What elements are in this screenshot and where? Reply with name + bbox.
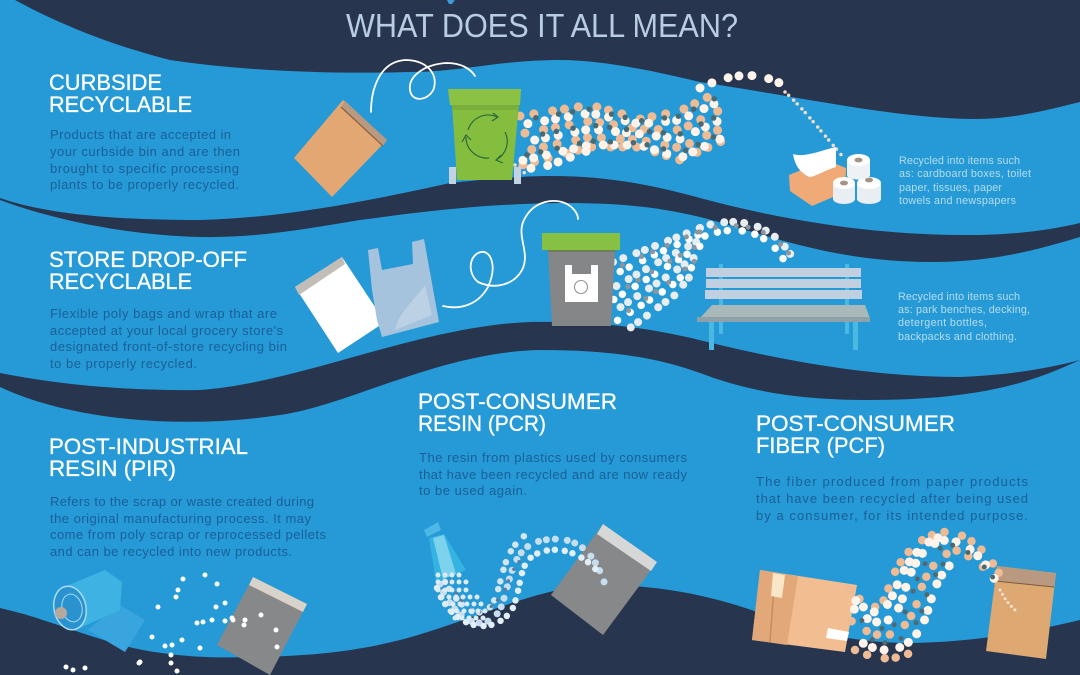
text block: curbside description: plants to be properly recycled.: [50, 177, 239, 192]
text block: store drop-off description: [50, 306, 287, 371]
text block: store drop-off description: to be properly recycled.: [50, 356, 197, 371]
navy wave 2: [0, 176, 1080, 262]
heading: post-consumer resin: RESIN (PCR): [418, 411, 546, 436]
text block: curbside description: brought to specific processing: [50, 161, 239, 176]
heading: curbside recyclable: RECYCLABLE: [49, 92, 192, 117]
icon: bag symbol: [565, 265, 598, 302]
bottom navy wave: [0, 585, 1080, 675]
icon: kraft mailer from fiber: [986, 566, 1056, 659]
text block: curbside recycled items: paper, tissues, paper: [899, 182, 1002, 194]
icon: paper particle stream: [515, 75, 844, 174]
icon: recycle arrows: [462, 113, 507, 163]
text block: curbside description: your curbside bin and are then: [50, 144, 240, 159]
icon: park bench: [697, 264, 870, 350]
icon: white poly mailer: [295, 257, 385, 353]
heading: store drop-off recyclable: RECYCLABLE: [49, 269, 192, 294]
text block: curbside recycled items: as: cardboard boxes, toilet: [899, 168, 1031, 180]
text block: curbside recycled items: towels and newspapers: [899, 195, 1017, 207]
icon: fiber particle stream: [850, 532, 1015, 658]
icon: plastic bag: [368, 239, 439, 337]
panel: post-consumer fiber text: [756, 411, 1028, 523]
text block: PIR description: come from poly scrap or reprocessed pellets: [50, 527, 326, 542]
text block: PCR description: to be used again.: [419, 483, 527, 498]
heading: store drop-off recyclable: [49, 247, 247, 294]
top navy wave: [15, 0, 1080, 119]
text block: PCR description: The resin from plastics used by consumers: [419, 450, 688, 465]
text block: PCR description: that have been recycled and are now ready: [419, 467, 688, 482]
navy wave 3: [0, 322, 1080, 422]
icon: kraft mailer: [294, 100, 387, 197]
panel: store drop-off text: [49, 247, 287, 371]
icon: plastic bottle: [424, 522, 466, 582]
icon: PCR resin stream: [437, 532, 606, 626]
text block: PCF description: that have been recycled after being used: [756, 491, 1028, 506]
heading: post-consumer resin: POST-CONSUMER: [418, 389, 617, 414]
text block: PCF description: [756, 474, 1028, 523]
icon: cardboard box: [752, 570, 857, 652]
icon: resin pellets: [66, 575, 277, 671]
arrow: white squiggle to grey bin: [443, 201, 578, 307]
heading: post-industrial resin: RESIN (PIR): [49, 456, 176, 481]
arrow: white squiggle to green bin: [371, 60, 475, 112]
heading: store drop-off recyclable: STORE DROP-OFF: [49, 247, 247, 272]
text block: PIR description: the original manufacturing process. It may: [50, 511, 312, 526]
text block: store drop-off description: designated front-of-store recycling bin: [50, 339, 287, 354]
heading: post-consumer fiber: [756, 411, 955, 458]
text block: store drop-off description: accepted at your local grocery store's: [50, 323, 284, 338]
text block: store drop-off recycled items: backpacks and clothing.: [898, 331, 1017, 343]
heading: post-consumer fiber: POST-CONSUMER: [756, 411, 955, 436]
heading: curbside recyclable: [49, 70, 192, 117]
heading: post-consumer resin: [418, 389, 617, 436]
text block: PIR description: Refers to the scrap or waste created during: [50, 494, 314, 509]
text block: store drop-off recycled items: detergent bottles,: [898, 317, 987, 329]
text block: PCF description: The fiber produced from paper products: [756, 474, 1028, 489]
icon: toilet paper rolls: [833, 154, 881, 204]
icon: green recycling bin: [448, 89, 521, 184]
icon: grey bag from scrap: [217, 577, 307, 675]
icon: grey drop-off bin: [542, 233, 620, 326]
panel: post-industrial resin text: [49, 434, 326, 559]
icon: plastic particle stream: [613, 222, 795, 328]
text block: curbside recycled items: [899, 155, 1031, 207]
heading: post-industrial resin: [49, 434, 248, 481]
text block: store drop-off recycled items: Recycled into items such: [898, 291, 1020, 303]
heading: curbside recyclable: CURBSIDE: [49, 70, 162, 95]
text block: PIR description: and can be recycled into new products.: [50, 544, 292, 559]
text block: curbside description: [50, 127, 240, 192]
text block: curbside description: Products that are accepted in: [50, 127, 231, 142]
text block: PCF description: by a consumer, for its intended purpose.: [756, 508, 1028, 523]
icon: tissue box: [789, 147, 846, 206]
title: WHAT DOES IT ALL MEAN?: [346, 7, 738, 44]
icon: film roll: [50, 570, 145, 652]
text block: PIR description: [50, 494, 326, 559]
text block: store drop-off description: Flexible poly bags and wrap that are: [50, 306, 277, 321]
text block: PCR description: [419, 450, 688, 498]
panel: curbside recyclable text: [49, 70, 240, 192]
text block: curbside recycled items: Recycled into items such: [899, 155, 1020, 167]
panel: post-consumer resin text: [418, 389, 688, 498]
text block: store drop-off recycled items: [898, 291, 1030, 343]
heading: post-consumer fiber: FIBER (PCF): [756, 433, 885, 458]
icon: grey bag from PCR: [551, 524, 657, 635]
text block: store drop-off recycled items: as: park benches, decking,: [898, 304, 1030, 316]
heading: post-industrial resin: POST-INDUSTRIAL: [49, 434, 248, 459]
